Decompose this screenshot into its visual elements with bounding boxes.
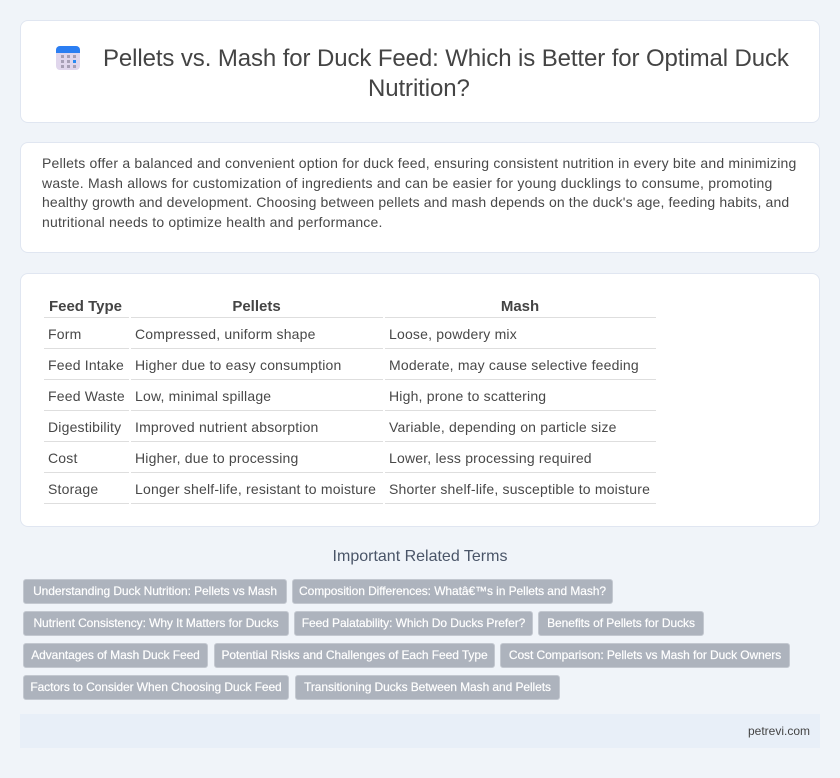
related terms tags [23,579,790,700]
footer bar [20,714,820,748]
related terms tags: Advantages of Mash Duck Feed [31,648,200,662]
table header: Mash [501,298,539,315]
table rows [44,317,656,504]
table rows: Feed Waste [48,388,125,404]
related terms tags: Factors to Consider When Choosing Duck Feed [30,680,282,694]
title: Nutrition? [368,75,470,102]
table rows: Variable, depending on particle size [389,419,617,435]
table rows: Improved nutrient absorption [135,419,319,435]
related terms tags: Understanding Duck Nutrition: Pellets vs Mash [33,584,277,598]
icon: calendar [56,46,80,70]
related terms tags: Cost Comparison: Pellets vs Mash for Duck Owners [509,648,781,662]
intro paragraph: waste. Mash allows for customization of ingredients and can be easier for young ducklings to consume, promoting [42,175,773,191]
table rows: Form [48,326,81,342]
table rows: Longer shelf-life, resistant to moisture [135,481,376,497]
panel: intro text [20,142,820,253]
table rows: High, prone to scattering [389,388,546,404]
table rows: Cost [48,450,78,466]
intro paragraph [42,155,797,230]
related terms tags: Potential Risks and Challenges of Each Feed Type [221,648,488,662]
panel: title card [20,20,820,123]
intro paragraph: healthy growth and development. Choosing between pellets and mash depends on the duck's age, feeding habits, and [42,194,789,210]
table rows: Digestibility [48,419,121,435]
related terms tags: Feed Palatability: Which Do Ducks Prefer? [302,616,525,630]
table rows: Shorter shelf-life, susceptible to moisture [389,481,650,497]
table rows: Higher due to easy consumption [135,357,342,373]
intro paragraph: nutritional needs to optimize health and performance. [42,214,383,230]
intro paragraph: Pellets offer a balanced and convenient option for duck feed, ensuring consistent nutrition in every bite and minimizing [42,155,797,171]
table rows: Moderate, may cause selective feeding [389,357,639,373]
panel: comparison table [20,273,820,527]
table rows: Low, minimal spillage [135,388,271,404]
table rows: Loose, powdery mix [389,326,517,342]
related terms tags: Nutrient Consistency: Why It Matters for Ducks [33,616,279,630]
related terms tags: Benefits of Pellets for Ducks [547,616,695,630]
title [103,45,789,102]
table header [49,298,539,315]
footer source: petrevi.com [748,724,810,738]
table header: Pellets [232,298,281,315]
table rows: Feed Intake [48,357,124,373]
heading: related terms: Important Related Terms [333,548,507,565]
related terms tags: Composition Differences: Whatâ€™s in Pellets and Mash? [299,584,606,598]
title: Pellets vs. Mash for Duck Feed: Which is Better for Optimal Duck [103,45,789,72]
table rows: Compressed, uniform shape [135,326,316,342]
table rows: Higher, due to processing [135,450,299,466]
table header: Feed Type [49,298,122,315]
table rows: Lower, less processing required [389,450,592,466]
related terms tags: Transitioning Ducks Between Mash and Pellets [304,680,551,694]
table rows: Storage [48,481,98,497]
